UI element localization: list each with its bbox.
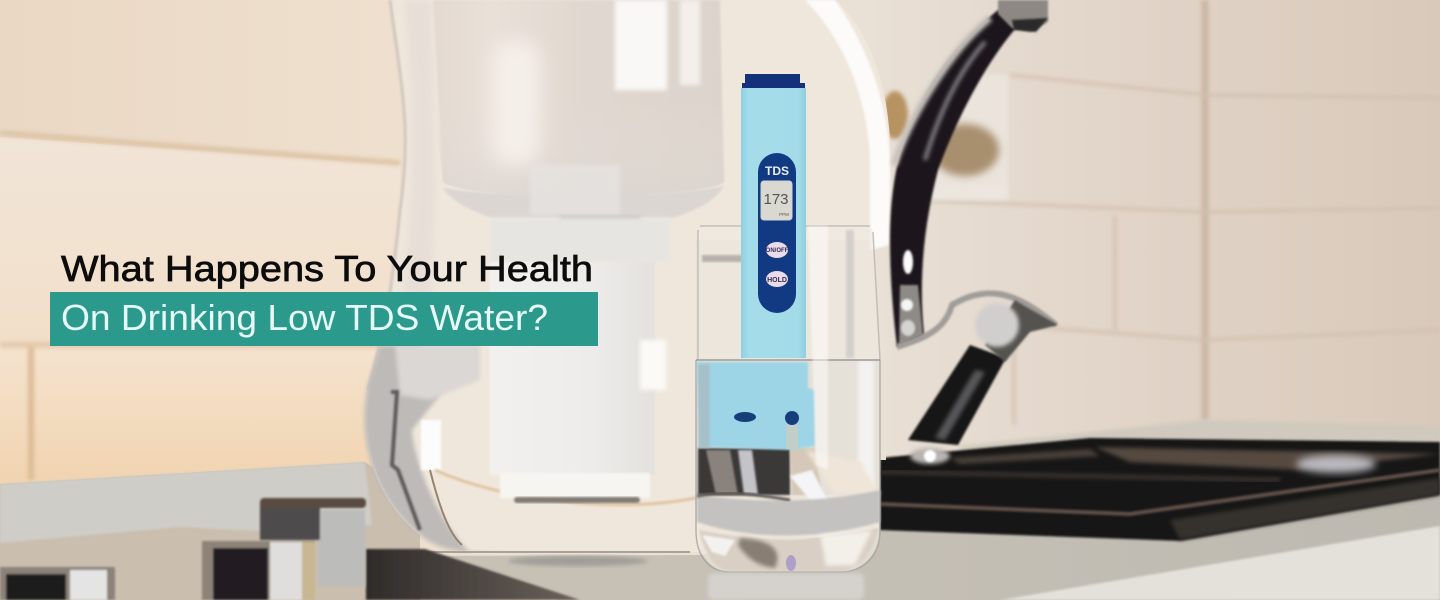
faucet neck [890, 10, 1016, 347]
faucet handle [897, 293, 1056, 347]
pitcher glass left base [364, 345, 480, 552]
meter buttons [766, 242, 789, 287]
faucet nozzle [998, 0, 1048, 32]
title line 1: What Happens To Your Health [61, 248, 593, 289]
submerged meter section [697, 362, 815, 450]
water pitcher [364, 0, 890, 566]
meter buttons: ON/OFF [766, 248, 789, 254]
meter control panel [758, 153, 796, 313]
water volume [696, 360, 880, 536]
faucet stem [908, 345, 1006, 445]
decorated tile [814, 75, 1008, 200]
meter display: PPM [779, 212, 789, 217]
blurred canisters on counter [0, 498, 580, 600]
title line 2: On Drinking Low TDS Water? [61, 297, 548, 338]
meter body [741, 88, 806, 358]
glass reflection stripe [808, 226, 828, 470]
title banner [50, 292, 598, 346]
meter display: 173 [763, 191, 789, 208]
drinking glass [696, 226, 880, 600]
pitcher handle [805, 0, 890, 250]
TDS meter [697, 74, 828, 470]
kitchen faucet [890, 0, 1058, 464]
countertop and backsplash ledge [0, 420, 1440, 600]
meter cap [742, 74, 805, 90]
filter reservoir [433, 0, 724, 225]
meter display [761, 181, 792, 220]
meter buttons: HOLD [767, 277, 787, 284]
filter cartridge [490, 262, 655, 503]
meter label: TDS [765, 164, 789, 178]
glass base [699, 528, 878, 571]
kitchen sink [880, 438, 1440, 541]
